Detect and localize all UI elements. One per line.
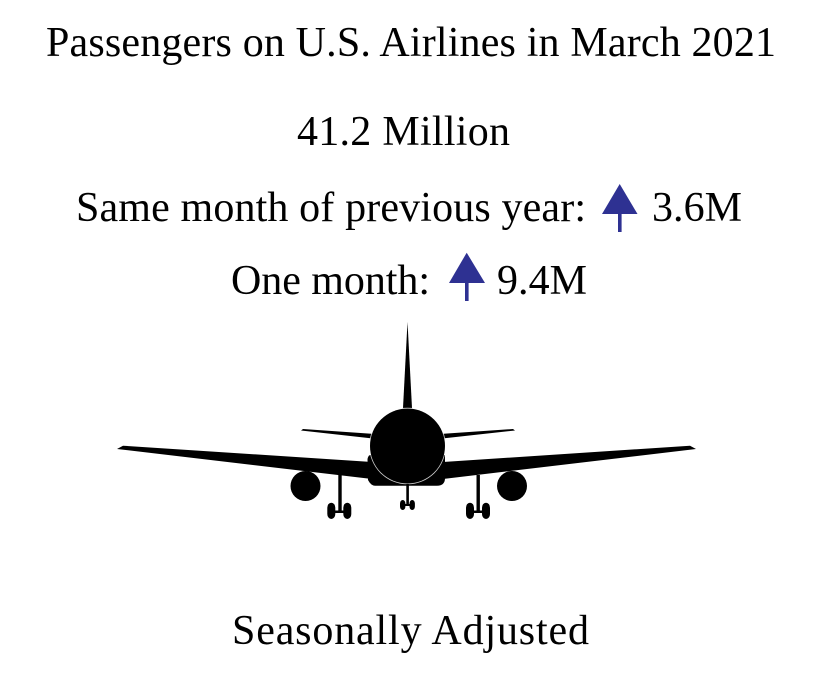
month-over-month comparison: One month: (231, 258, 430, 304)
icon: airplane front view (117, 322, 696, 519)
headline value: 41.2 Million (297, 109, 510, 155)
month-over-month comparison (231, 253, 587, 304)
month-over-month comparison: 9.4M (497, 258, 587, 304)
icon: up arrow month-over-month (449, 253, 485, 301)
footer note: Seasonally Adjusted (232, 608, 589, 654)
year-over-year comparison: 3.6M (652, 185, 742, 231)
icon: up arrow year-over-year (602, 184, 638, 232)
title: Passengers on U.S. Airlines in March 2021 (46, 20, 776, 66)
year-over-year comparison: Same month of previous year: (76, 185, 586, 231)
